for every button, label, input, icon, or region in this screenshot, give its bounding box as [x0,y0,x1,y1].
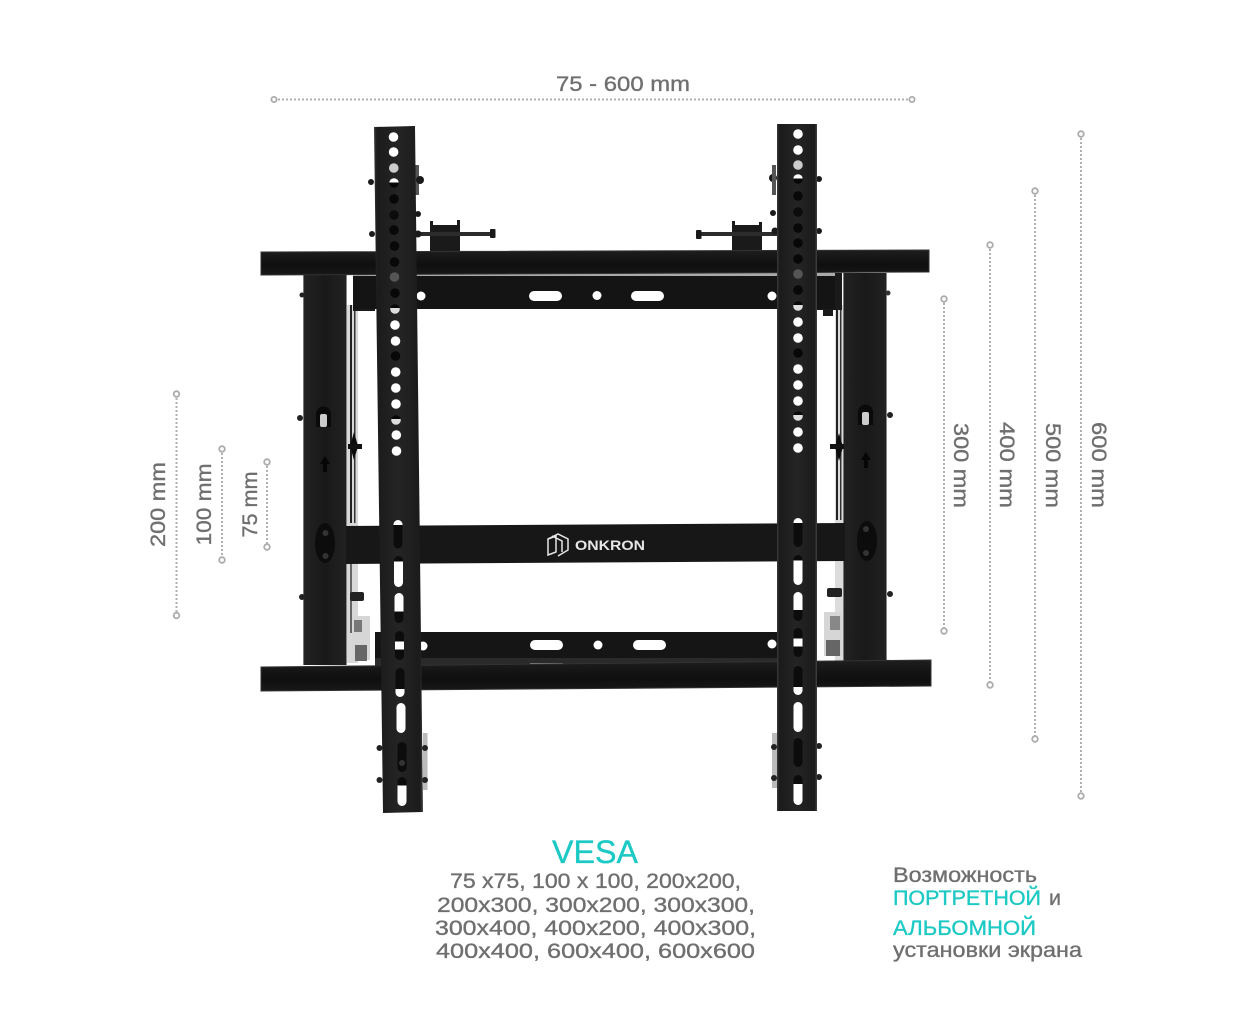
dimension: 100 mm: 100 mm [193,464,216,546]
VESA sizes list [435,870,756,963]
VESA sizes list: 75 x75, 100 x 100, 200x200, [450,870,741,893]
icon: left tilt bracket with screw [368,165,496,251]
left side upright column [297,274,375,665]
rail holes [793,129,803,805]
dimension: 400 mm: 400 mm [995,422,1018,508]
top horizontal bar [261,250,929,275]
dimension: 300 mm [941,296,972,634]
VESA sizes list: 400x400, 600x400, 600x600 [436,940,755,963]
dimension: 400 mm [987,242,1018,688]
orientation note: ПОРТРЕТНОЙ [893,886,1041,910]
logo wordmark: ONKRON [575,537,645,553]
middle bar with logo [346,523,845,564]
left vertical rail [374,126,428,813]
orientation note [893,864,1082,962]
bottom horizontal bar [261,660,931,691]
dimension: overall width 75 - 600 mm [271,73,915,102]
orientation note: и [1049,887,1061,910]
orientation note: Возможность [893,864,1037,887]
dimension: 75 mm [239,459,270,550]
product: wall mount bracket [261,124,931,813]
VESA sizes list: 200x300, 300x200, 300x300, [437,894,755,917]
lower mounting plate [375,632,778,668]
dimension: 75 mm: 75 mm [239,472,262,538]
dimension: 500 mm: 500 mm [1041,423,1064,508]
dimension: 100 mm [193,446,225,563]
upper mounting plate [353,273,835,309]
rail holes [389,132,406,806]
right vertical rail [771,124,822,811]
orientation note: АЛЬБОМНОЙ [893,916,1036,940]
dimension: 300 mm: 300 mm [949,423,972,508]
icon: ONKRON logo cube [548,534,568,556]
dimension: 200 mm: 200 mm [147,462,170,547]
VESA heading: VESA [552,834,639,870]
icon: right tilt bracket with screw [696,165,822,251]
dimension: 600 mm [1078,131,1110,799]
dimension: 600 mm: 600 mm [1087,422,1110,508]
dimension: 200 mm [147,391,179,618]
dimension: 500 mm [1032,188,1064,742]
right side upright column [817,273,893,663]
dimension: overall width 75 - 600 mm: 75 - 600 mm [556,73,690,96]
orientation note: установки экрана [893,939,1082,962]
VESA sizes list: 300x400, 400x200, 400x300, [435,917,756,940]
